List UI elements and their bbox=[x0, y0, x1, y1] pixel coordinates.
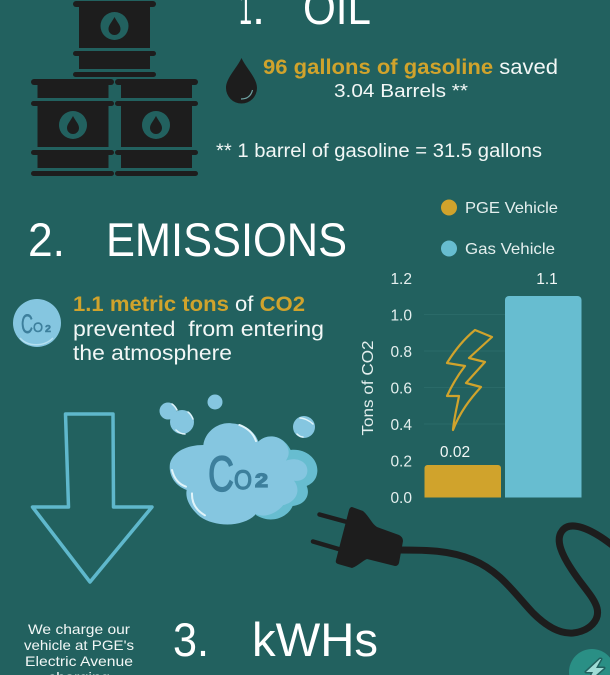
text: CO2 prevented: prevented from entering bbox=[73, 318, 324, 341]
text: barrels: 3.04 Barrels ** bbox=[334, 80, 468, 101]
cloud label: O bbox=[234, 465, 252, 495]
y axis labels: 0.0 bbox=[390, 490, 412, 507]
heading: 2. EMISSIONS: EMISSIONS bbox=[106, 213, 347, 266]
y axis labels: 0.6 bbox=[390, 380, 412, 398]
y axis title: Tons of CO2 bbox=[360, 340, 377, 436]
chart legend: PGE Vehicle bbox=[465, 200, 558, 217]
chart legend bbox=[441, 200, 558, 258]
cloud label: C bbox=[208, 446, 234, 502]
bar: gas vehicle bbox=[505, 296, 582, 498]
text: CO2 prevented: the atmosphere bbox=[73, 342, 232, 365]
icon: down arrow outline bbox=[32, 414, 152, 582]
bar value labels: 1.1 bbox=[536, 271, 558, 288]
icon: charging badge bbox=[569, 649, 610, 675]
text: charging note bbox=[24, 621, 134, 675]
heading: 3. kWHs: 3. bbox=[173, 613, 209, 666]
y axis labels: 0.4 bbox=[390, 417, 412, 434]
text: charging note: Electric Avenue bbox=[25, 653, 133, 669]
heading: 3. kWHs: kWHs bbox=[252, 613, 378, 666]
cloud shapes bbox=[170, 423, 317, 525]
chart legend: Gas Vehicle bbox=[465, 241, 555, 258]
y axis labels: 0.8 bbox=[390, 344, 412, 361]
text: CO2 prevented bbox=[73, 293, 324, 365]
icon: CO2 bubble: 2 bbox=[45, 324, 51, 335]
heading: 1. OIL bbox=[239, 0, 371, 34]
icon: CO2 bubble: C bbox=[21, 309, 33, 339]
icon: stacked oil barrels bbox=[31, 1, 198, 176]
heading: 2. EMISSIONS: 2. bbox=[28, 213, 65, 266]
y axis labels: 1.2 bbox=[390, 271, 412, 288]
bar value labels bbox=[440, 271, 558, 461]
bar value labels: 0.02 bbox=[440, 444, 470, 461]
icon: CO2 bubble bbox=[13, 299, 61, 347]
y axis labels bbox=[390, 271, 412, 507]
bubbles bbox=[160, 402, 176, 420]
icon: lightning bolt outline bbox=[447, 330, 492, 430]
icon: oil drop bbox=[226, 58, 257, 104]
text: barrel footnote: ** 1 barrel of gasoline = 31.5 gallons bbox=[216, 141, 542, 162]
icon: CO2 cloud bbox=[160, 394, 317, 525]
text: gasoline saved: 96 gallons of gasoline saved bbox=[263, 56, 558, 79]
bar: PGE vehicle bbox=[424, 465, 501, 498]
icon: CO2 bubble: O bbox=[33, 319, 43, 335]
icon: electric plug and cord bbox=[313, 507, 610, 633]
cloud label: 2 bbox=[255, 471, 268, 492]
text: CO2 prevented: 1.1 metric tons of CO2 bbox=[73, 293, 305, 316]
y axis labels: 1.0 bbox=[390, 308, 412, 324]
text: charging note: vehicle at PGE's bbox=[24, 637, 134, 653]
text: charging note: We charge our bbox=[28, 621, 130, 637]
y axis labels: 0.2 bbox=[390, 454, 412, 470]
heading: 3. kWHs bbox=[173, 613, 378, 666]
cloud label bbox=[208, 446, 268, 502]
bar chart: tons of CO2 bbox=[360, 271, 582, 507]
